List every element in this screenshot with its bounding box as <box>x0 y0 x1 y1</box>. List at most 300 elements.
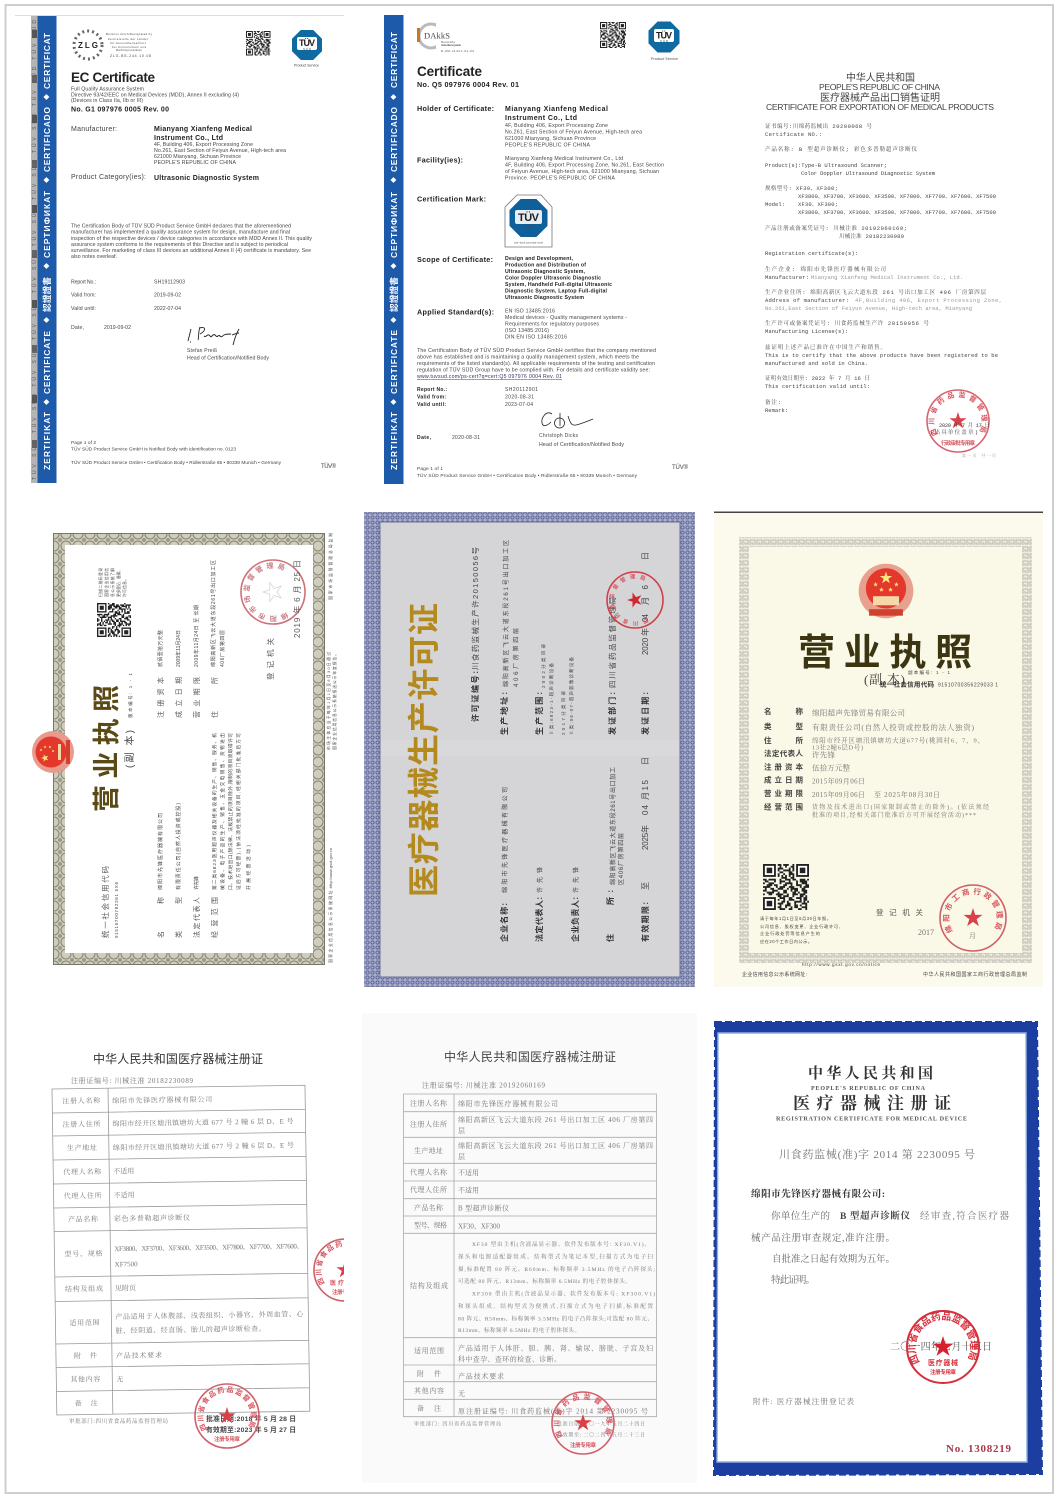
copy label and credit code <box>864 669 998 688</box>
footer notes <box>326 533 337 963</box>
registration table: 产品技术要求 <box>116 1350 162 1360</box>
certification statement: assurance system conforms to the requirements of this Directive and is subject to periodical <box>71 242 288 248</box>
registration table: 产品适用于人体腹部、浅表组织、小器官、外周血管、心 <box>115 1309 304 1321</box>
certificate details: Address of manufacturer: <box>765 297 849 304</box>
applied standards: DIN EN ISO 13485:2016 <box>505 334 567 340</box>
field values: 货物及技术进出口(国家限制或禁止的除外)。(依法须经 <box>812 803 989 811</box>
footer notes <box>417 464 689 479</box>
scope: Color Doppler Ultrasonic Diagnostic <box>505 276 601 282</box>
report details: 2022-07-04 <box>154 306 181 312</box>
TÜV logo: Product Service <box>294 64 319 68</box>
manufacturer block: No.261, East Section of Feiyun Avenue, High-tech area <box>154 148 286 154</box>
QR note: 公司信息、股权变更、企业行政许可、 <box>760 923 843 930</box>
certification mark: tuv-sud.com/ps-cert <box>514 240 543 244</box>
certificate number: No. Q5 097976 0004 Rev. 01 <box>417 80 519 89</box>
upper half fields: 月6 <box>641 584 650 605</box>
left fields: 口、技术进出口(除法律、法规禁止的项目除外,限制的项目须取得许可 <box>227 733 234 890</box>
left fields: 法定代表人 <box>192 897 201 938</box>
certificate body: 自批准之日起有效期为五年。 <box>772 1253 895 1265</box>
stamp: registration: 注册专用章 <box>930 1368 956 1376</box>
approving department and dates: 批准日期: 二〇一九年五月二十四日 <box>557 1420 645 1428</box>
scope: Design and Development, <box>505 256 574 262</box>
QR code <box>763 864 809 910</box>
scope: Production and Distribution of <box>505 262 586 268</box>
side band: blue multilingual certificate strip: СЕРТИФИКАТ <box>389 191 399 258</box>
registration table: 其他内容 <box>414 1386 444 1395</box>
upper half fields: 2020 年 <box>640 628 650 655</box>
field values <box>812 708 989 819</box>
certificate details: 4F,Building 406, Export Processing Zone, <box>855 297 1002 304</box>
upper half fields: 川食药监械生产许20150056号 <box>470 547 480 670</box>
right fields: 成立日期 <box>174 677 183 718</box>
scope: Ultrasonic Diagnostic System <box>505 295 584 301</box>
holder block: Instrument Co., Ltd <box>505 115 577 122</box>
side band: blue multilingual certificate strip: CERTIFICATE <box>389 330 399 394</box>
left fields: 绵阳市先锋医疗器械有限公司 <box>157 813 164 890</box>
field values: 13社2幢6层D号) <box>812 742 863 752</box>
right fields: 贰佰壹拾万元整 <box>157 630 164 667</box>
registration table: 绵阳市先锋医疗器械有限公司 <box>458 1099 558 1108</box>
scope <box>417 255 612 301</box>
DAkkS logo: Deutsche <box>441 40 455 44</box>
copy label and credit code: 副本编号: 1 - 1 <box>908 669 950 676</box>
panel: business license rotated <box>32 533 337 965</box>
registration table: 注册人住所 <box>62 1119 101 1129</box>
date: 二〇一四年七月十五日 <box>890 1340 992 1353</box>
holder block <box>417 104 642 148</box>
registration table: 结构及组成 <box>65 1284 103 1293</box>
certification statement: The Certification Body of TÜV SÜD Product Service GmbH certifies that the company mentioned <box>417 347 656 354</box>
manufacturer block: 621000 Mianyang, Sichuan Province <box>154 154 241 160</box>
left fields: 械设备、电子产品的生产、销售、五金交电销售、货物进出 <box>219 733 226 890</box>
TÜV logo: SÜD <box>660 39 669 43</box>
footer notes: Page 1 of 1 <box>417 466 443 472</box>
registration table: 生产地址 <box>67 1143 97 1152</box>
registration table: 和探头组成。结构型式为便携式,扫描方式为电子扫描,标准配置 <box>458 1302 653 1310</box>
TÜV logo: Product Service <box>651 57 678 61</box>
side band: blue multilingual certificate strip: ◆ <box>391 399 398 405</box>
certificate details: Model: <box>765 201 785 208</box>
footer notes: http://www.gsxt.gov.cn <box>329 848 333 888</box>
registration authority: 登记机关 <box>265 638 275 680</box>
certificate details: 川械注准 20182230089 <box>839 232 904 240</box>
side band: blue multilingual certificate strip: ◆ <box>44 94 51 100</box>
manufacturer block: Mianyang Xianfeng Medical <box>154 126 252 133</box>
registration table <box>52 1085 310 1415</box>
signature: Head of Certification/Notified Body <box>187 356 269 362</box>
registration table: 绵阳高新区飞云大道东段 261 号出口加工区 406 厂房第四 <box>458 1141 653 1150</box>
lower half fields: 2025年 <box>640 825 650 850</box>
registration table: XF300 型由主机(含液晶显示器、软件发布版本号: XF300.V1) <box>472 1290 655 1298</box>
footer notes: 国家市场监督管理总局监制 <box>328 533 333 600</box>
registration table: 其他内容 <box>70 1374 100 1384</box>
stamp date text <box>930 421 996 459</box>
registration table: 见附页 <box>115 1283 136 1293</box>
QR note: 应在20个工作日内公示。 <box>760 938 812 945</box>
panel: device registration XF3800 <box>52 1051 344 1449</box>
side band: blue multilingual certificate strip: СЕРТИФИКАТ <box>42 190 52 258</box>
guilloche border <box>54 534 324 964</box>
lower half fields: 许先锋 <box>536 867 544 893</box>
lower half fields: 有效期限: <box>640 902 650 942</box>
applied standards: Requirements for regulatory purposes <box>505 322 599 328</box>
report details: Valid until: <box>71 306 96 312</box>
footer notes: TÜV® <box>321 463 337 470</box>
credit code: 91510700782261 5X6 <box>114 882 119 938</box>
ZLG logo: Medizinprodukten <box>116 48 142 52</box>
registration table: 适用范围 <box>414 1346 444 1355</box>
signature <box>187 327 269 362</box>
left fields: 有限责任公司(自然人投资或控股) <box>175 803 182 890</box>
copy label: 版本编号: 1 - 1 <box>127 673 134 718</box>
stamp: administration: 月 <box>969 932 976 940</box>
registration table <box>404 1094 656 1417</box>
footer notes <box>71 440 337 470</box>
registration table: 描,标准配置 80 阵元、R60mm、标称频率 3.5MHz 的电子凸阵探头; <box>458 1265 655 1273</box>
stamp: approval: 四川省药品监督管理局 <box>553 1393 613 1438</box>
upper half fields: 04 <box>641 613 650 622</box>
QR code <box>246 31 270 56</box>
side band: blue multilingual certificate strip: CERTIFICADO <box>389 107 399 172</box>
stamp: cut off at right: 注册专用章 <box>332 1288 358 1296</box>
certificate details: 生产许可或备案凭证号: 川食药监械生产许 20150056 号 <box>765 319 929 327</box>
panel: medical device production license <box>364 512 695 987</box>
upper half fields: 发证部门: <box>607 692 617 735</box>
registration table: 代理人名称 <box>410 1168 448 1176</box>
certification statement: above has established and is maintaining a quality management system, which meets the <box>417 354 639 360</box>
upper half fields: 四川省药品监督管理局 <box>607 597 617 688</box>
side band: blue multilingual certificate strip: CERTIFICADO <box>42 107 52 172</box>
approving department and dates: 批准日期:2018 年 5 月 28 日 <box>206 1414 296 1423</box>
side band: blue multilingual certificate strip: ◆ <box>44 177 51 183</box>
DAkkS logo: DAkkS <box>424 30 450 40</box>
field labels: 注册资本 <box>764 762 804 772</box>
facility block: Facility(ies): <box>417 156 463 164</box>
lower half fields: 绵阳市先锋医疗器械有限公司 <box>501 787 509 893</box>
certificate details: XF30、XF300; <box>798 201 838 208</box>
approving department and dates: 有效期至:2023 年 5 月 27 日 <box>206 1425 296 1434</box>
registration table: XF30、XF300 <box>458 1222 500 1230</box>
holder block: PEOPLE'S REPUBLIC OF CHINA <box>505 142 591 148</box>
side band: grey TÜV SÜD strip: TÜV SÜD TÜV SÜD TÜV SÜD TÜV SÜD TÜV SÜD TÜV SÜD TÜV SÜD TÜV SÜD TÜV SÜD TÜV SÜD <box>31 20 38 480</box>
certificate details: 生产企业: 绵阳市先锋医疗器械有限公司 <box>765 265 886 273</box>
stamp: cut off at right: 四川省食品药品监督管理局 <box>315 1240 342 1286</box>
certificate details: 兹证明上述产品已准许在中国生产和销售。 <box>765 343 886 351</box>
registration table: 层 <box>458 1152 465 1161</box>
side band: blue multilingual certificate strip: ZERTIFIKAT <box>389 411 399 470</box>
TÜV logo <box>292 30 322 68</box>
certificate details: Remark: <box>765 407 788 414</box>
upper half fields: 生产地址: <box>499 692 509 735</box>
report details: 2020-08-31 <box>505 394 534 400</box>
upper half fields: 绵阳高新区飞云大道东段261号出口加工区 <box>502 540 510 687</box>
registration table: 可选配 80 阵元、R13mm、标称频率 6.5MHz 的电子腔体探头。 <box>458 1277 631 1285</box>
side band: blue multilingual certificate strip <box>38 16 56 483</box>
upper half fields: Ⅱ类:06-07-超声影像诊断设备 <box>568 656 575 735</box>
report details: 2019-09-02 <box>154 292 181 298</box>
left fields: 类 型 <box>174 897 183 938</box>
stamp: cut off at right <box>313 1238 344 1302</box>
upper half fields: 许可证编号: <box>470 671 480 722</box>
system description: Directive 93/42/EEC on Medical Devices (MDD), Annex II excluding (4) <box>71 92 239 98</box>
footer notes: 中华人民共和国国家工商行政管理总局监制 <box>923 971 1027 978</box>
QR note: 请于每年1月1日至6月30日年报。 <box>760 915 831 922</box>
registration table: 附 件 <box>74 1351 97 1360</box>
lower half fields: 日 <box>641 757 650 765</box>
stamp date text: 第一页 共一页 <box>962 452 996 459</box>
right fields <box>156 560 226 718</box>
report details <box>71 280 185 331</box>
registration table: 型号、规格 <box>414 1220 447 1230</box>
TÜV logo: TÜV <box>656 30 672 40</box>
side band: blue multilingual certificate strip: CERTIFICATE <box>42 331 52 394</box>
registration table: 脏、经阴道、经直肠、胎儿的超声诊断检查。 <box>116 1324 266 1335</box>
approving department and dates <box>414 1420 645 1438</box>
certificate details: XF3800、XF3700、XF3600、XF3500、XF7800、XF7700、XF7600、XF7500 <box>798 193 996 200</box>
right fields: 绵阳高新区飞云大道东段261号出口加工区 <box>210 560 217 667</box>
field values: 2015年09月06日 <box>812 776 865 786</box>
QR note: 息公示系统了解 <box>110 568 115 597</box>
certificate details: Manufacturing License(s): <box>765 328 848 335</box>
right fields: 住 所 <box>210 677 219 718</box>
stamp date text: (出具单位盖章) <box>930 428 978 436</box>
holder block: Holder of Certificate: <box>417 104 494 113</box>
stamp: approval: 注册专用章 <box>570 1441 596 1449</box>
certification statement: also notes overleaf. <box>71 254 117 260</box>
copy label <box>123 673 136 768</box>
registration table: 无 <box>458 1390 465 1398</box>
certification statement: The Certification Body of TÜV SÜD Product Service GmbH declares that the aforementioned <box>71 222 291 230</box>
stamp: registration: 医疗器械 <box>928 1358 958 1367</box>
upper half fields: 2017分类目录 <box>560 690 567 735</box>
certification statement: inspection of the respective devices / device categories in accordance with MDD Annex II. This quality <box>71 236 312 242</box>
registration table: B 型超声诊断仪 <box>458 1204 509 1212</box>
ZLG logo: bei Arzneimitteln und <box>112 45 146 49</box>
lower half fields: 月15 <box>641 779 650 800</box>
stamp: issuing authority: 行政审批专用章 <box>941 439 975 447</box>
scope: Scope of Certificate: <box>417 255 493 264</box>
certification statement <box>71 222 312 260</box>
DAkkS logo: D-ZM-11321-01-00 <box>441 49 474 53</box>
certificate details <box>765 122 1002 414</box>
certificate body: B 型超声诊断仪 <box>840 1210 910 1222</box>
registration table: 不适用 <box>114 1190 135 1200</box>
registration table: 产品技术要求 <box>458 1372 504 1380</box>
footer notes: 国家企业信用信息公示系统网址: <box>328 888 333 963</box>
registration table: 产品适用于人体肝、胆、胰、肾、输尿、膀胱、子宫及妇 <box>458 1344 653 1352</box>
DAkkS logo: Akkreditierungsstelle <box>441 43 461 47</box>
registration table: 绵阳高新区飞云大道东段 261 号出口加工区 406 厂房第四 <box>458 1115 653 1124</box>
panel: Certificate Q5 <box>362 15 697 485</box>
certificate border <box>364 512 695 987</box>
stamp: approval: 注册专用章 <box>214 1435 240 1443</box>
applied standards <box>417 308 627 340</box>
facility block <box>417 156 664 182</box>
registration table: XF30 型由主机(含液晶显示器、软件发布版本号: XF30.V1)、 <box>472 1240 650 1248</box>
copy label: (副 本) <box>123 730 136 768</box>
applied standards: EN ISO 13485:2016 <box>505 308 555 314</box>
side band: blue multilingual certificate strip: ◆ <box>44 399 51 405</box>
stamp: drug administration: 四川省药品监督管理局 <box>609 574 648 626</box>
lower half fields: 至 <box>641 882 650 890</box>
report details: Valid from: <box>417 394 446 400</box>
QR code <box>97 603 131 637</box>
certificate body: 经审查,符合医疗器 <box>920 1210 1009 1222</box>
ZLG logo: ZLG-BS-244.10.08 <box>110 54 151 58</box>
title: 中华人民共和国医疗器械注册证 <box>444 1049 616 1064</box>
certification statement: requirements of the listed standard(s). All applicable requirements of the testing and certification <box>417 361 655 367</box>
footer notes <box>742 962 1027 978</box>
side band: blue multilingual certificate strip: CERTIFICAT <box>389 31 399 88</box>
upper half fields: 日 <box>641 552 650 560</box>
applied standards: Applied Standard(s): <box>417 308 494 316</box>
panel: registration certificate blue border <box>713 1021 1043 1476</box>
stamp: drug administration <box>606 571 664 629</box>
certificate body: 械产品注册审查规定,准许注册。 <box>751 1232 895 1244</box>
title <box>766 71 994 112</box>
copy label and credit code: (副 本) <box>864 672 905 687</box>
stamp: cut off at right: 医疗器械 <box>330 1279 360 1287</box>
blue border <box>714 1022 1042 1475</box>
certificate details: This certification valid until: <box>765 383 870 390</box>
left fields: 许先锋 <box>193 876 200 890</box>
side band: blue multilingual certificate strip: 認證證書 <box>389 277 399 312</box>
report details: SH19112903 <box>154 280 185 286</box>
license title: 医疗器械生产许可证 <box>406 603 442 897</box>
stamp: administration <box>939 884 1007 952</box>
certificate details: 产品注册或备案凭证号: 川械注准 20192060169; <box>765 224 907 232</box>
right fields: 406厂房第四层 <box>219 630 226 667</box>
registration table: 注册人名称 <box>62 1096 101 1105</box>
upper half fields: 2002分类目录 <box>540 644 547 688</box>
registration table: XF3800、XF3700、XF3600、XF3500、XF7800、XF7700、XF7600、 <box>114 1242 303 1253</box>
stamp: approval <box>194 1383 260 1449</box>
registration table: 原注册证编号: 川食药监械(准)字 2014 第 2230095 号 <box>458 1406 648 1416</box>
panel: certificate for exportation <box>765 71 1002 459</box>
scope: System, Handheld Full-digital Ultrasonic <box>505 282 612 288</box>
manufacturer block: PEOPLE'S REPUBLIC OF CHINA <box>154 160 237 166</box>
left fields: 第二类6823医用超声仪器及相关设备的生产、销售、服务、机 <box>211 733 218 890</box>
attachment note: 附件: 医疗器械注册登记表 <box>753 1396 854 1406</box>
system description: No. G1 097976 0005 Rev. 00 <box>71 106 169 114</box>
field values: 绵阳市经开区塘汛镇塘坊大道677号(桃园村6、7、9、 <box>812 736 984 744</box>
certificate body: 绵阳市先锋医疗器械有限公司: <box>751 1188 885 1200</box>
panel: device registration XF30 <box>403 1049 657 1455</box>
footer notes: Page 1 of 2 <box>71 440 96 446</box>
applied standards: Medical devices - Quality management systems - <box>505 315 627 321</box>
left fields: 开展经营活动) <box>245 845 252 890</box>
title: 中华人民共和国医疗器械注册证 <box>93 1051 263 1066</box>
report details <box>417 387 538 441</box>
certification statement: regulation of TÜV SÜD Group have to be complied with. For details and certificate validity see: <box>417 366 650 374</box>
right fields: 2009年11月24日 <box>175 630 182 667</box>
registration table: 绵阳市经开区塘汛镇塘坊大道 677 号 2 幢 6 层 D、E 号 <box>113 1140 294 1152</box>
lower half fields: 住 所: <box>605 890 615 942</box>
side band: blue multilingual certificate strip <box>384 15 404 484</box>
registration table: 注册人名称 <box>410 1098 448 1108</box>
scope: Diagnostic System, Laptop Full-digital <box>505 288 608 294</box>
certification statement: surveillance. For marketing of class III devices an additional Annex II (4) certificate is mandatory. See <box>71 248 311 254</box>
footer notes: TÜV® <box>672 464 689 471</box>
ZLG logo: für Gesundheitsschutz <box>110 41 147 45</box>
left fields: 证后方可经营),(依法须经批准的项目,经相关部门批准后方可 <box>235 733 242 890</box>
certificate details: XF3800、XF3700、XF3600、XF3500、XF7800、XF7700、XF7600、XF7500 <box>798 209 996 216</box>
footer notes: TÜV SÜD Product Service GmbH • Certification Body • Ridlerstraße 65 • 80339 Munich • Germany <box>417 472 638 479</box>
registration table: 探头和电源适配器组成。结构型式为笔记本型,扫描方式为电子扫 <box>458 1252 653 1260</box>
lower half fields: 04 <box>641 804 650 815</box>
registration table: 结构及组成 <box>410 1281 448 1290</box>
field values: 有限责任公司(自然人投资或控股的法人独资) <box>812 722 974 732</box>
title: PEOPLE'S REPUBLIC OF CHINA <box>811 1086 926 1092</box>
field labels: 类 型 <box>764 721 804 731</box>
certification mark: SÜD <box>524 224 534 228</box>
registration table: 产品名称 <box>414 1203 444 1212</box>
stamp date text: 2020 年 7 月 17 日 <box>939 421 990 429</box>
report details: 2023-07-04 <box>505 402 533 408</box>
registration table: 层 <box>458 1126 465 1135</box>
field labels <box>764 706 804 812</box>
ZLG logo <box>74 31 153 59</box>
holder block: 621000 Mianyang, Sichuan Province <box>505 136 596 142</box>
side band: blue multilingual certificate strip: ◆ <box>391 177 398 183</box>
certification statement: manufacturer has implemented a quality assurance system for design, manufacture and final <box>71 230 290 236</box>
signature: Head of Certification/Notified Body <box>539 442 624 448</box>
field values: 批准的项目,经相关部门批准后方可开展经营活动)*** <box>812 811 976 819</box>
stamp: issuing authority: 四川省药品监督管理局 <box>928 391 988 436</box>
registration table: 绵阳市先锋医疗器械有限公司 <box>112 1095 212 1105</box>
field labels: 经营范围 <box>764 802 803 812</box>
registration table: 备 注 <box>417 1404 441 1412</box>
certificate body: 你单位生产的 <box>771 1210 830 1222</box>
field labels: 住 所 <box>764 735 804 745</box>
copy label and credit code: 91510700356229033 1 <box>938 682 998 688</box>
emblem <box>32 731 74 773</box>
title: PEOPLE'S REPUBLIC OF CHINA <box>819 82 940 92</box>
holder block: No.261, East Section of Feiyun Avenue, High-tech area <box>505 130 642 136</box>
left fields: 名 称 <box>156 897 165 938</box>
left fields: 经营范围 <box>210 897 219 938</box>
TÜV logo: TÜV <box>299 38 315 48</box>
date: 2019 年 6 月 25 日 <box>292 560 302 638</box>
report details: 2019-09-02 <box>104 325 131 331</box>
field labels: 营业期限 <box>764 788 804 798</box>
report details: Date, <box>417 435 432 441</box>
credit code <box>100 866 119 938</box>
right fields: 注册资本 <box>156 677 165 718</box>
field values: 至 2025年08月30日 <box>874 790 940 799</box>
QR note: 企业行政处罚等信息产生的 <box>760 930 820 937</box>
registration table: 产品名称 <box>68 1214 99 1224</box>
lower half fields: 企业负责人: <box>570 897 580 942</box>
side band: blue multilingual certificate strip: ◆ <box>44 317 51 323</box>
footer notes: TÜV SÜD Product Service GmbH is Notified Body with identification no. 0123 <box>71 446 236 452</box>
footer notes: 市场主体应当于每年1月1日至6月30日通过 <box>326 652 331 750</box>
registration table: 适用范围 <box>69 1318 100 1327</box>
certificate body: 特此证明。 <box>771 1274 815 1286</box>
side band: blue multilingual certificate strip: ◆ <box>391 263 398 269</box>
certificate details: Registration certificate(s): <box>765 250 858 257</box>
report details: Date, <box>71 325 84 331</box>
QR note: 国家企业信用信 <box>104 568 109 597</box>
heading: Certificate: Certificate <box>417 64 482 79</box>
title: 医疗器械注册证 <box>793 1093 951 1113</box>
copy label and credit code: 统一社会信用代码 <box>880 680 934 688</box>
registration table: 代理人住所 <box>64 1191 102 1200</box>
holder block: 4F, Building 406, Export Processing Zone <box>505 123 608 129</box>
certificate serial: No. 1308219 <box>946 1443 1012 1455</box>
upper half fields: 生产范围: <box>534 692 544 735</box>
certificate details: 产品名称: B 型超声诊断仪; 彩色多普勒超声诊断仪 <box>765 145 917 153</box>
